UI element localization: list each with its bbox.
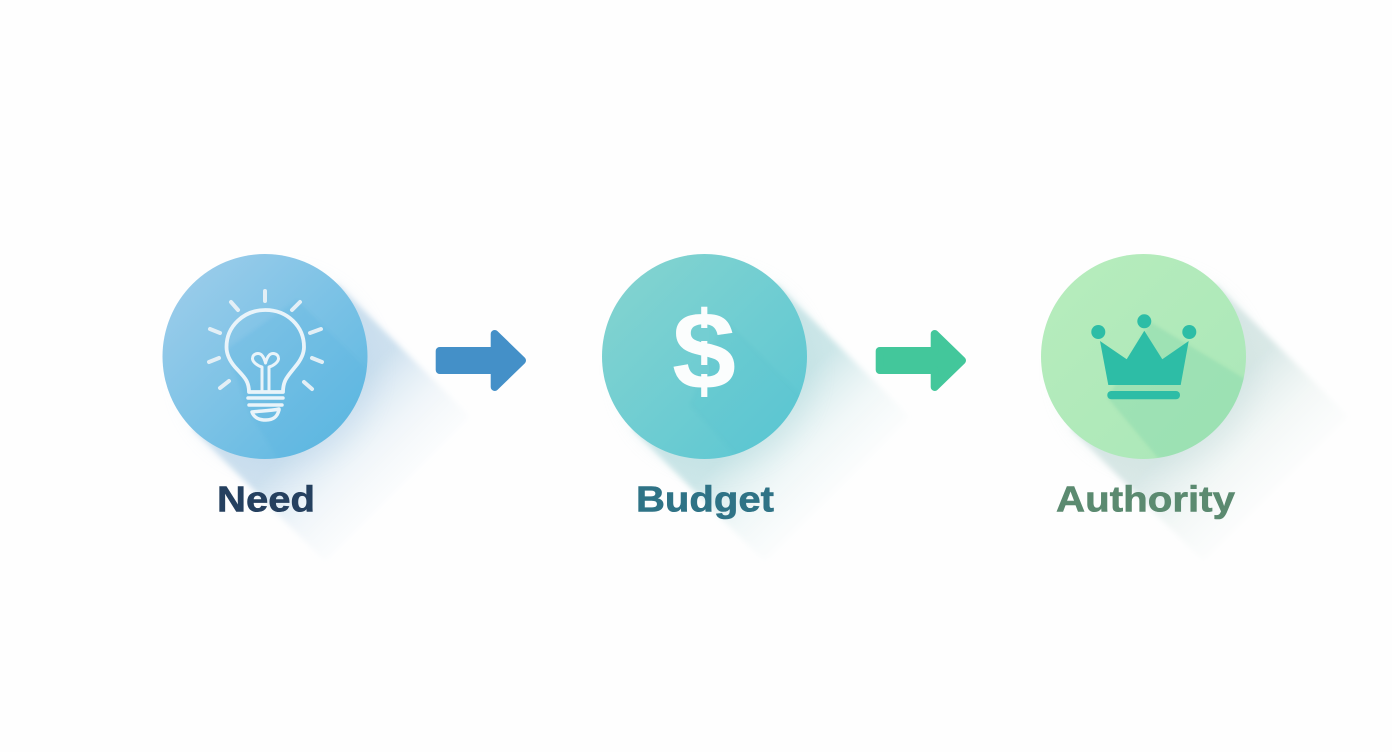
arrow: need to budget	[440, 334, 522, 387]
infographic: need, budget, authority flow	[162, 254, 1318, 540]
step: authority	[1041, 254, 1318, 531]
icon: light bulb	[209, 291, 322, 420]
long shadow: authority	[1071, 284, 1348, 562]
label: budget: Budget	[636, 478, 774, 520]
long shadow: budget	[632, 284, 910, 562]
circle: budget	[602, 254, 807, 459]
icon shadow: need	[229, 304, 311, 394]
long shadow: need	[192, 284, 470, 562]
soft glow: budget	[619, 272, 815, 468]
circle: authority	[1041, 254, 1246, 459]
arrow: budget to authority	[880, 334, 962, 387]
soft glow: need	[180, 272, 376, 468]
step: need	[162, 254, 448, 540]
icon shadow: authority	[1109, 323, 1244, 458]
label: need: Need	[217, 478, 315, 520]
step: budget	[602, 254, 886, 538]
icon: crown	[1091, 314, 1196, 399]
circle: need	[162, 254, 368, 459]
icon: dollar sign: $	[672, 290, 736, 413]
soft glow: authority	[1058, 272, 1254, 468]
label: authority: Authority	[1056, 478, 1235, 520]
icon shadow: budget	[690, 320, 820, 480]
